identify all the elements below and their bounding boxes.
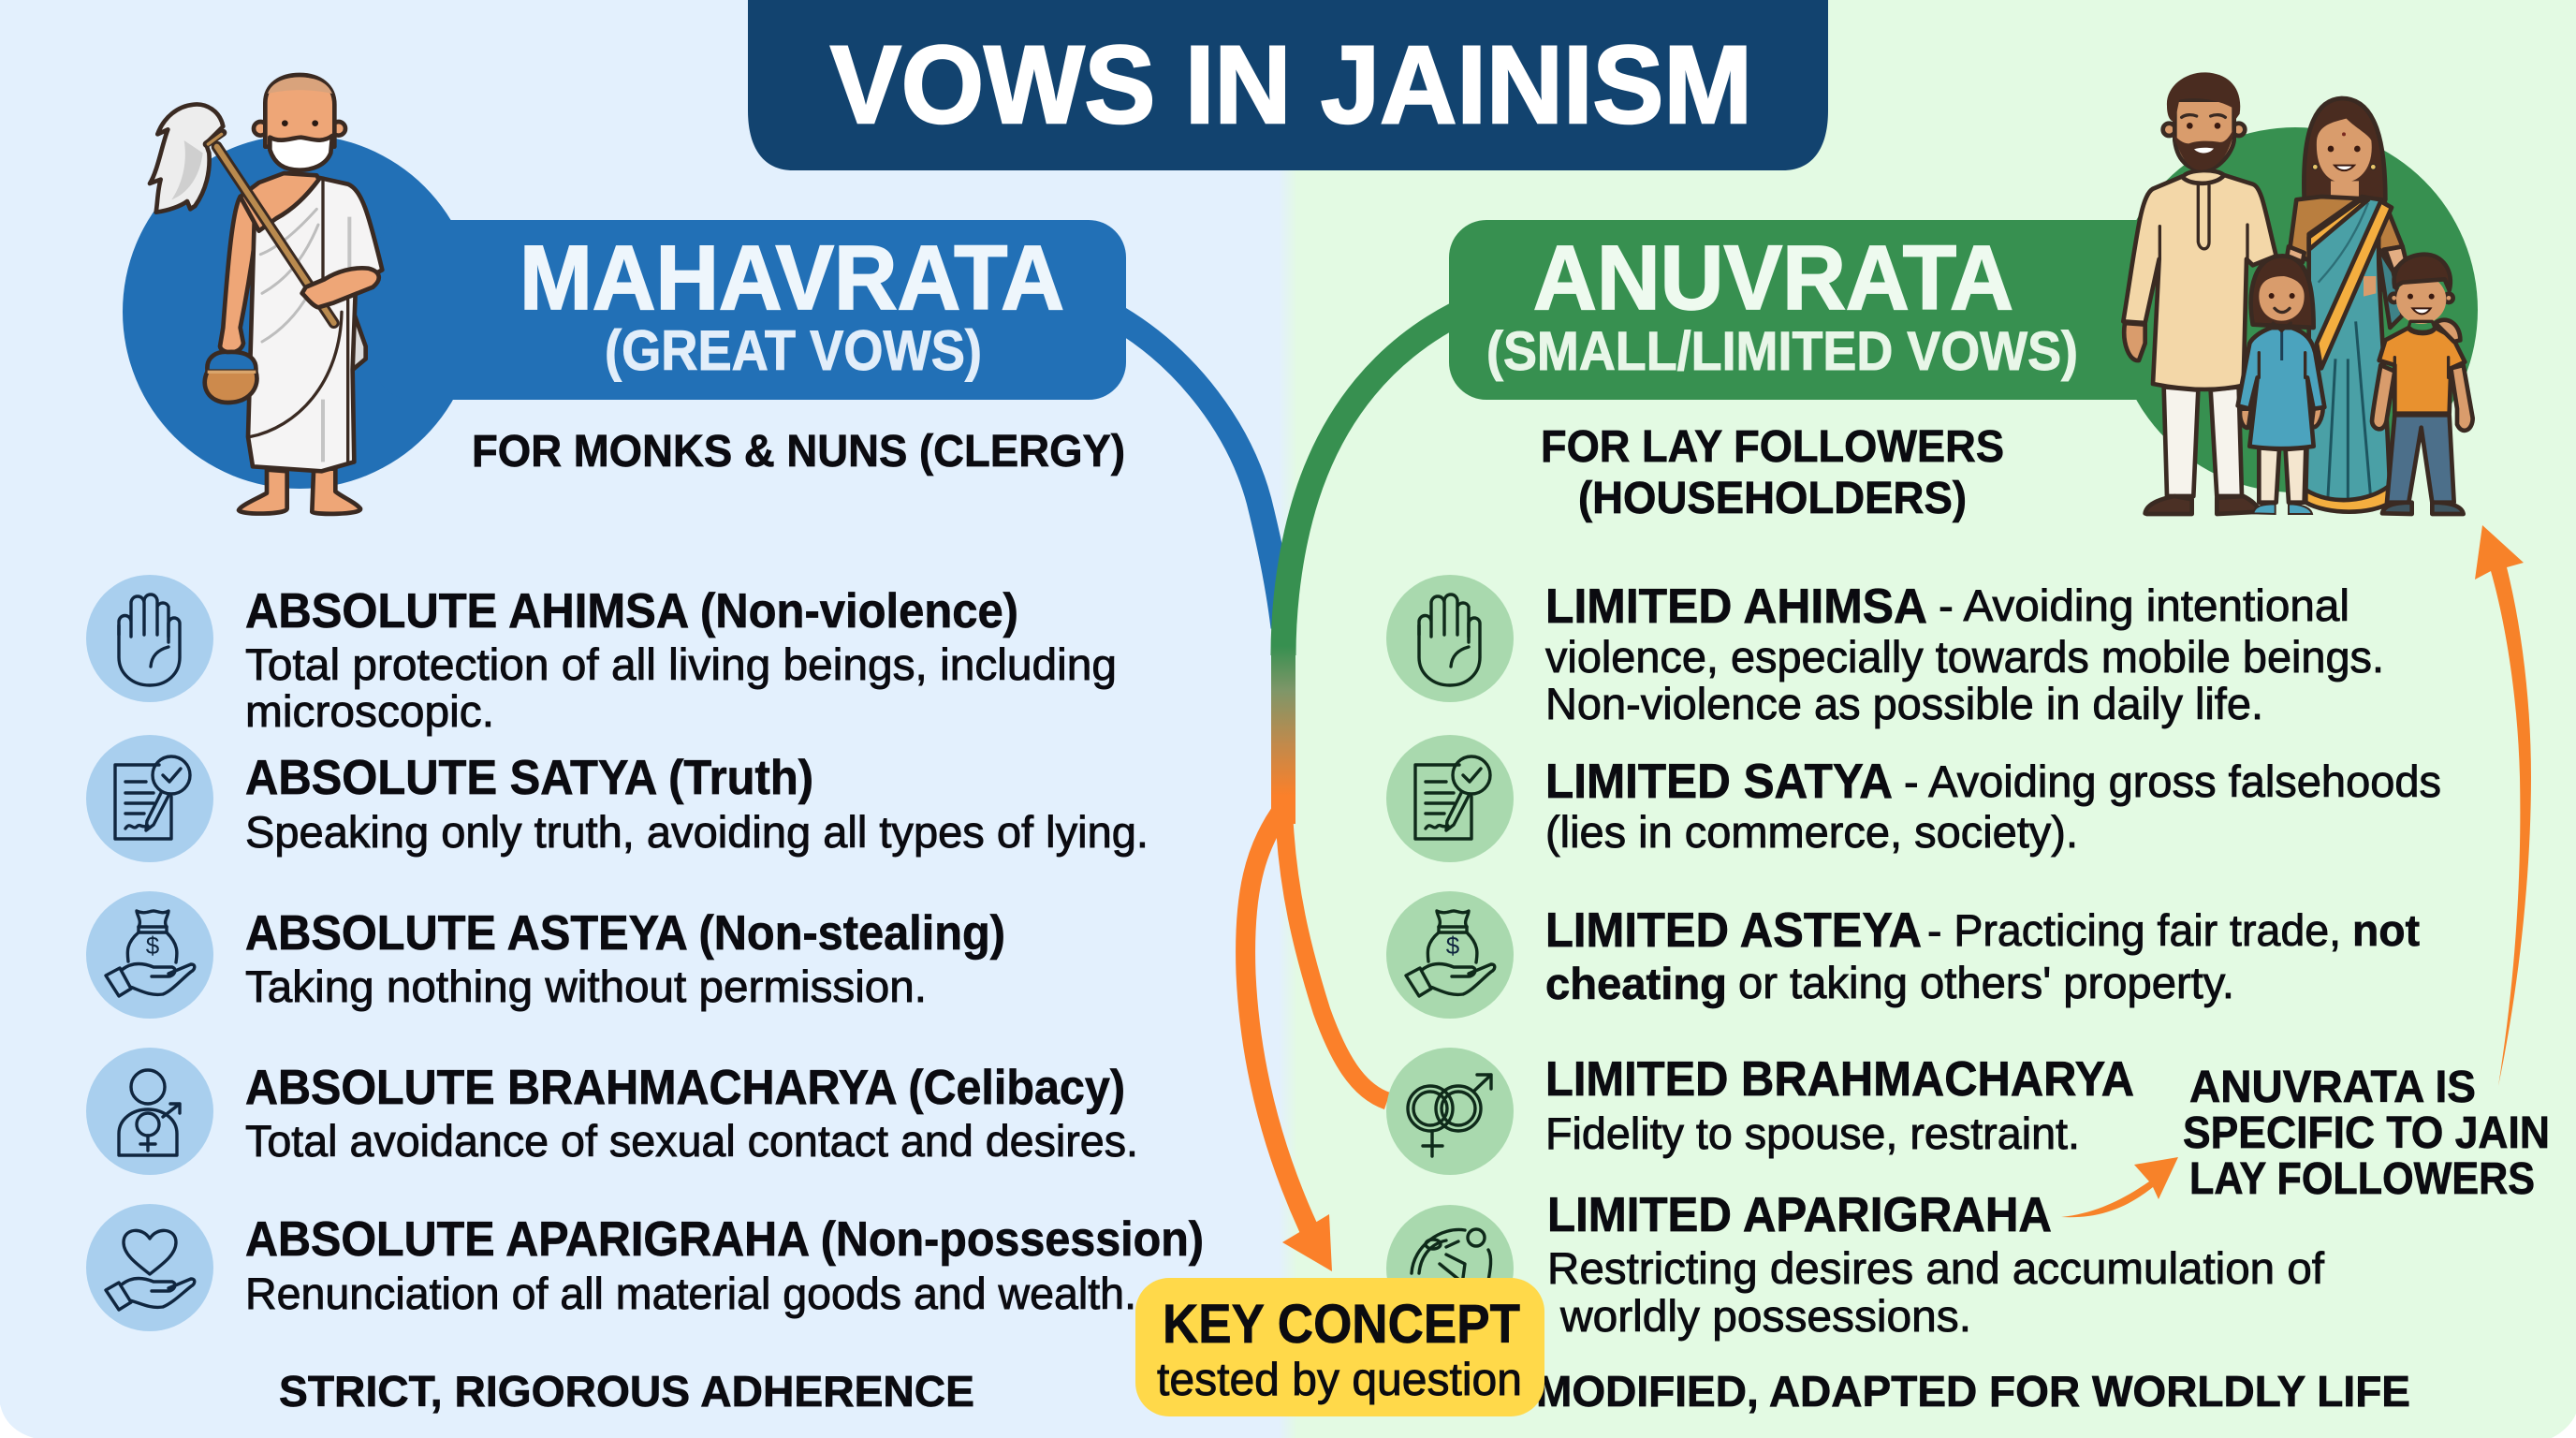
vow row: limited asteya: cheating [1545,959,1727,1008]
icon: money bag on hand [86,891,213,1019]
vow row: absolute satya: Speaking only truth, avoiding all types of lying. [245,807,1149,857]
callout: anuvrata is specific to jain lay followers: SPECIFIC TO JAIN [2183,1108,2550,1158]
anuvrata heading: ANUVRATA [1533,227,2013,329]
vow row: absolute satya [86,735,1149,862]
vow row: absolute asteya [86,891,1005,1019]
panel: anuvrata vow list [1386,575,2441,1341]
vow row: limited asteya: - Practicing fair trade, [1927,905,2341,955]
icon: person with gender symbols [86,1048,213,1175]
vow row: absolute ahimsa: ABSOLUTE AHIMSA (Non-violence) [245,584,1018,638]
anuvrata audience: (HOUSEHOLDERS) [1578,474,1967,523]
vow row: limited asteya [1386,891,2420,1019]
vow row: limited ahimsa: Non-violence as possible in daily life. [1545,679,2263,728]
figure: father [2123,72,2276,514]
callout: anuvrata is specific to jain lay followers: LAY FOLLOWERS [2189,1154,2535,1204]
vow row: limited aparigraha: Restricting desires and accumulation of [1547,1243,2325,1293]
vow row: limited satya: - Avoiding gross falsehoods [1904,756,2441,806]
vow row: limited aparigraha: LIMITED APARIGRAHA [1547,1188,2052,1242]
vow row: absolute ahimsa: Total protection of all living beings, including [245,639,1117,689]
icon: reduced possessions [1386,1205,1514,1332]
mahavrata subtitle: (GREAT VOWS) [605,319,982,382]
icon: raised hand green [1386,575,1514,702]
vow row: absolute brahmacharya [86,1048,1138,1175]
vow row: absolute satya: ABSOLUTE SATYA (Truth) [245,751,813,805]
mahavrata audience: FOR MONKS & NUNS (CLERGY) [472,427,1125,477]
vow row: limited asteya: LIMITED ASTEYA [1545,903,1922,958]
illustration: family [2123,72,2473,514]
vow row: absolute aparigraha: ABSOLUTE APARIGRAHA (Non-possession) [245,1212,1204,1267]
footer: strict adherence: STRICT, RIGOROUS ADHERENCE [279,1367,974,1416]
vow row: limited brahmacharya: LIMITED BRAHMACHARYA [1545,1052,2134,1107]
vow row: limited ahimsa: - Avoiding intentional [1939,580,2349,630]
arrowhead: key concept arrow [1282,1214,1332,1271]
arrow: aparigraha to callout [2061,1157,2178,1217]
icon: signed document [86,735,213,862]
callout: key concept: KEY CONCEPT [1163,1294,1520,1355]
vow row: limited asteya: or taking others' property. [1738,958,2234,1007]
figure: boy [2372,255,2473,514]
vow row: absolute aparigraha: Renunciation of all material goods and wealth. [245,1269,1136,1318]
icon: interlocked gender rings [1386,1048,1514,1175]
callout: anuvrata is specific to jain lay followers: ANUVRATA IS [2189,1063,2476,1112]
vow row: absolute asteya: ABSOLUTE ASTEYA (Non-stealing) [245,906,1005,961]
callout: key concept [1135,1278,1544,1416]
vow row: limited aparigraha: worldly possessions. [1559,1291,1971,1341]
anuvrata header [1449,127,2478,492]
arrow: callout up to family [2475,525,2531,1086]
vow row: absolute brahmacharya: Total avoidance of sexual contact and desires. [245,1116,1138,1166]
anuvrata subtitle: (SMALL/LIMITED VOWS) [1486,321,2078,382]
callout: key concept: tested by question [1157,1355,1522,1405]
title text: VOWS IN JAINISM [830,23,1752,147]
vow row: limited satya: LIMITED SATYA [1545,755,1893,809]
vow row: limited brahmacharya [1386,1048,2134,1175]
anuvrata audience: FOR LAY FOLLOWERS [1541,422,2004,472]
vow row: limited ahimsa: violence, especially towards mobile beings. [1545,632,2384,682]
vow row: absolute ahimsa [86,575,1117,736]
icon: raised hand [86,575,213,702]
vow row: absolute ahimsa: microscopic. [245,686,494,736]
vow row: limited satya: (lies in commerce, society). [1545,807,2078,857]
vow row: limited ahimsa: LIMITED AHIMSA [1545,580,1927,634]
vow row: absolute asteya: Taking nothing without permission. [245,961,927,1011]
vow row: limited aparigraha [1386,1188,2325,1341]
illustration: monk [150,75,382,514]
vow row: limited satya [1386,735,2441,862]
connector curves: blue, green and orange [1119,315,1456,1228]
figure: mother [2287,98,2406,512]
panel: mahavrata vow list [86,575,1204,1331]
vow row: absolute aparigraha [86,1204,1204,1331]
vow row: absolute brahmacharya: ABSOLUTE BRAHMACHARYA (Celibacy) [245,1061,1125,1115]
icon: money bag green [1386,891,1514,1019]
callout: anuvrata is specific to jain lay followers [2183,1063,2550,1204]
vow row: limited asteya: not [2352,905,2420,955]
vow row: limited brahmacharya: Fidelity to spouse, restraint. [1545,1108,2080,1158]
footer: modified adapted: MODIFIED, ADAPTED FOR WORLDLY LIFE [1536,1367,2410,1416]
figure: girl [2238,256,2324,514]
anuvrata audience [1541,422,2004,523]
title banner [748,0,1828,170]
mahavrata heading: MAHAVRATA [520,227,1064,329]
icon: signed document green [1386,735,1514,862]
vow row: limited ahimsa [1386,575,2384,728]
mahavrata header [123,135,1126,489]
icon: heart over hand [86,1204,213,1331]
